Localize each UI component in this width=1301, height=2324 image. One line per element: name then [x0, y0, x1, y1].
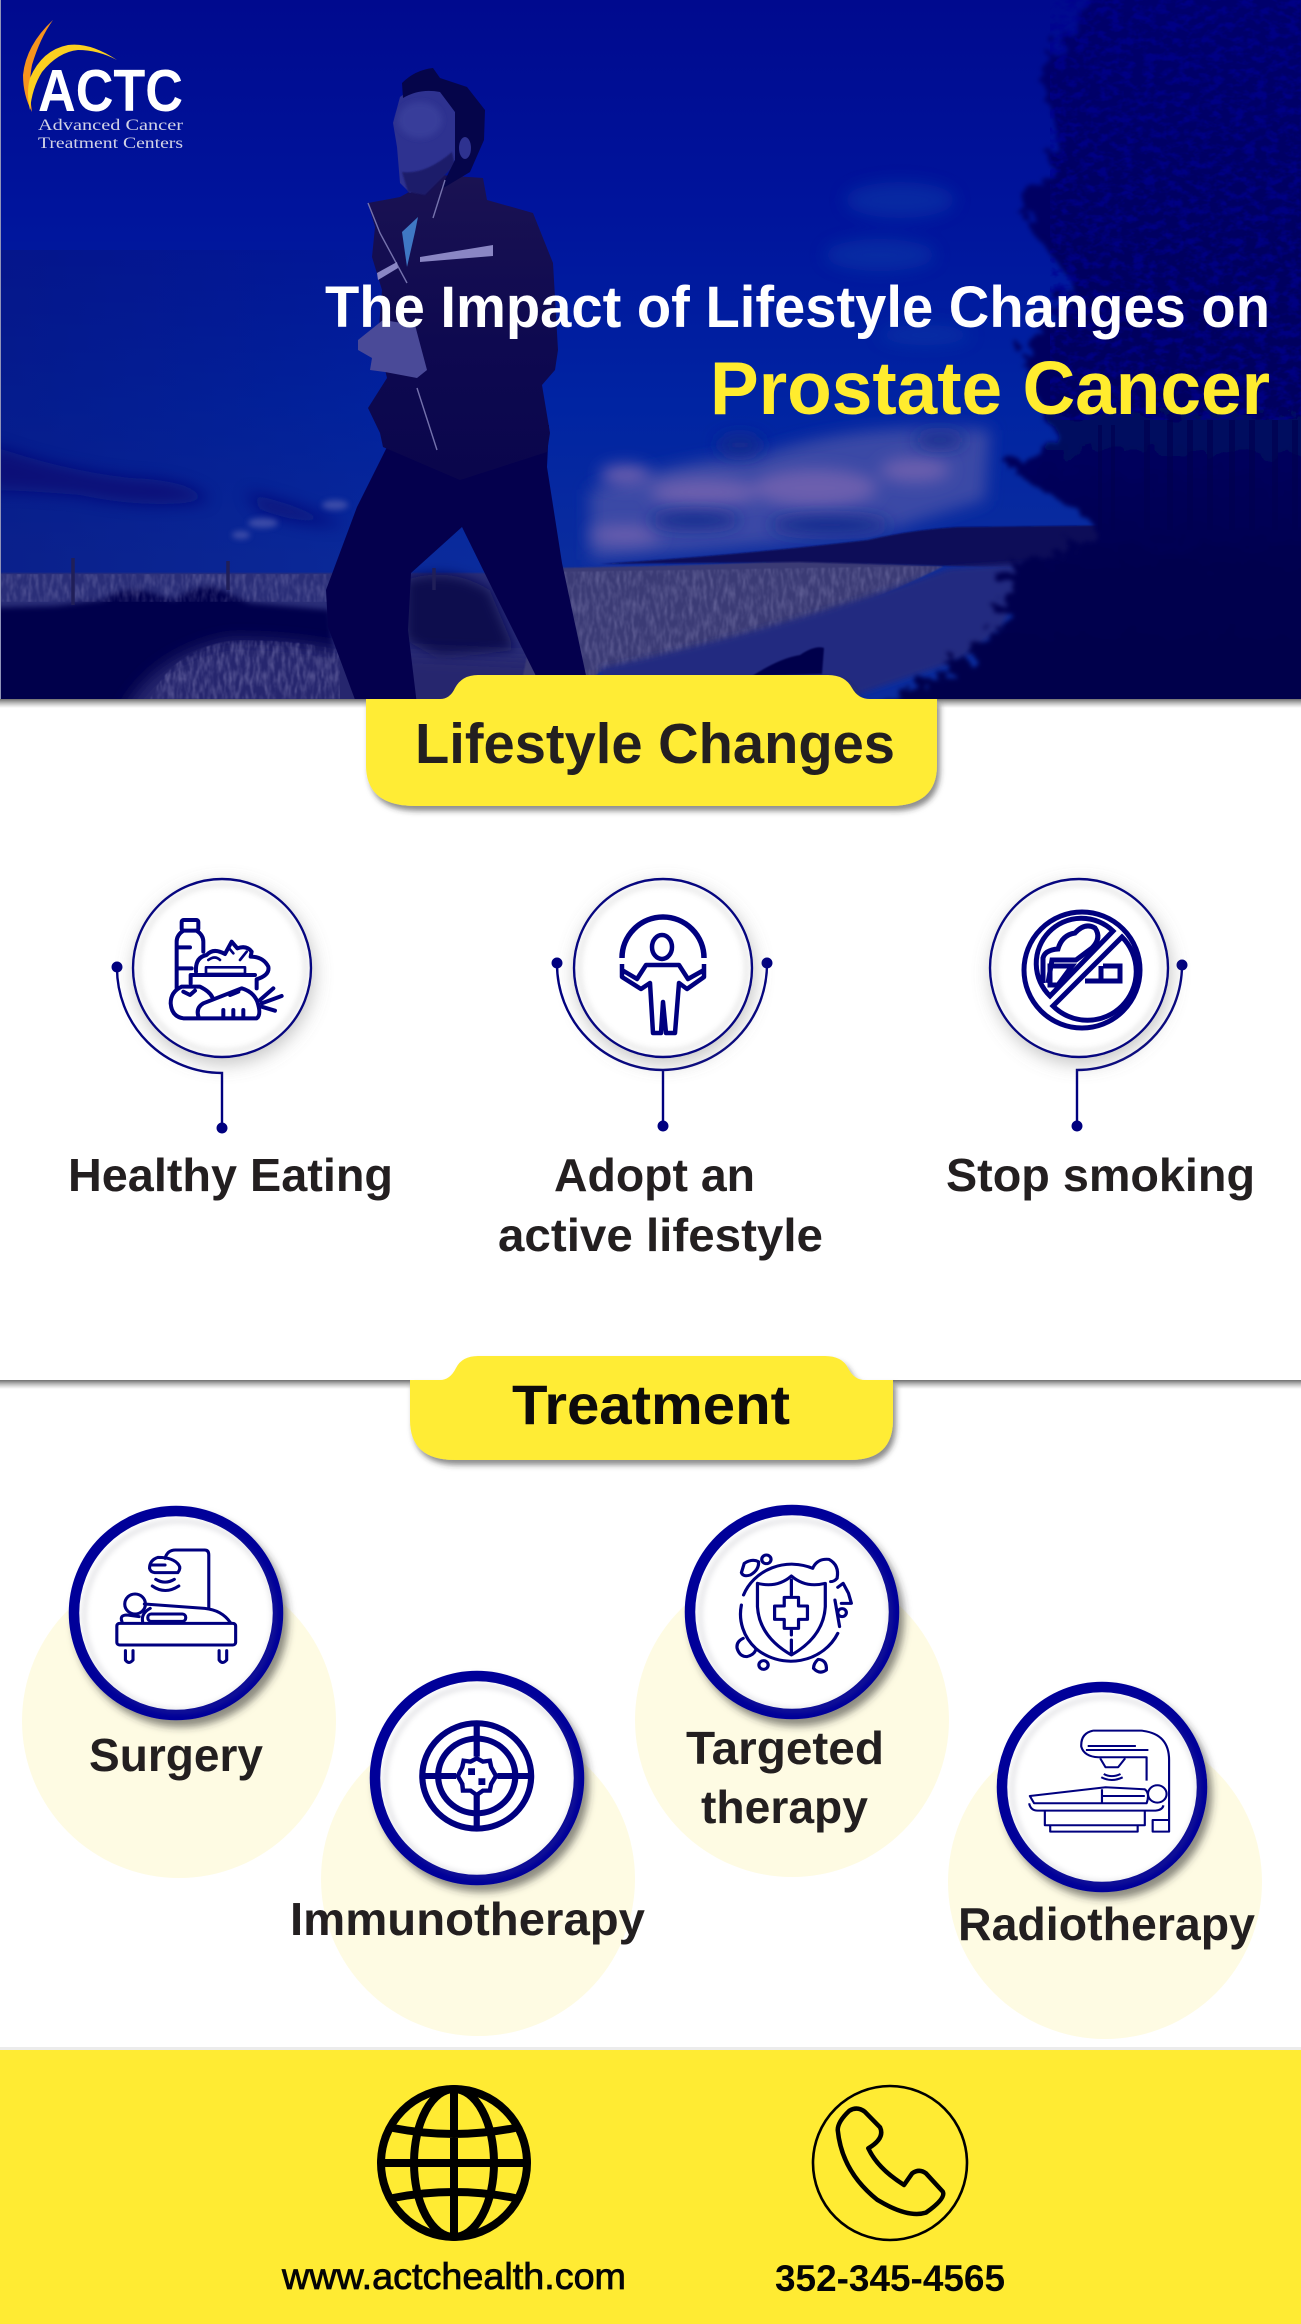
- phone circle: [813, 2086, 967, 2240]
- canopy: [882, 0, 1301, 699]
- icon: shield: [737, 1555, 851, 1672]
- phone number: 352-345-4565: [775, 2258, 1005, 2299]
- zipper trim: [368, 180, 445, 450]
- panel: contact footer: [0, 2047, 1301, 2324]
- handset: [838, 2109, 943, 2214]
- circle: [133, 879, 311, 1057]
- logo subtitle line 2: Treatment Centers: [38, 135, 183, 152]
- icon: food basket: [171, 920, 282, 1018]
- label: Radiotherapy: [958, 1898, 1255, 1950]
- logo: ACTC: [23, 20, 184, 152]
- connector dots: [112, 962, 228, 1134]
- texture right field: [564, 566, 938, 675]
- tab text: Lifestyle Changes: [415, 712, 895, 776]
- label: Surgery: [89, 1729, 263, 1781]
- branch texture: [1050, 0, 1301, 420]
- face highlight: [398, 102, 442, 138]
- logo arc: orange: [23, 20, 53, 112]
- label line 2: therapy: [701, 1781, 868, 1833]
- sky: [1, 0, 1098, 699]
- circle: [990, 879, 1168, 1057]
- face: [393, 89, 455, 193]
- reflective stripes: [377, 245, 493, 280]
- dark clouds left: [0, 445, 345, 525]
- icon: no smoking: [1024, 912, 1140, 1028]
- ring inner shadow: [700, 1520, 890, 1710]
- icon: surgery bed: [117, 1550, 236, 1662]
- runner: [326, 68, 587, 705]
- ring: [690, 1510, 894, 1714]
- icon: globe: [381, 2089, 527, 2237]
- ring inner shadow: [385, 1686, 575, 1876]
- ring inner shadow: [1012, 1697, 1198, 1883]
- circle inner halo: [995, 884, 1163, 1052]
- label: stop smoking: Stop smoking: [946, 1149, 1255, 1201]
- hero bottom shadow: [0, 699, 1301, 708]
- small light clouds: [232, 500, 348, 539]
- heading tab: Lifestyle Changes: [366, 675, 937, 806]
- label: Immunotherapy: [290, 1893, 645, 1945]
- connector arc: [557, 963, 767, 1126]
- line 1: Adopt an: [554, 1149, 755, 1201]
- icon: jump rope: [622, 917, 704, 1033]
- grass mound: [126, 634, 524, 699]
- icon: target: [422, 1723, 532, 1830]
- panel: treatments: [22, 1510, 1262, 2039]
- left sky dimming: [1, 250, 320, 573]
- circle inner halo: [138, 884, 306, 1052]
- title line 2: Prostate Cancer: [710, 346, 1270, 430]
- logo subtitle line 1: Advanced Cancer: [38, 117, 184, 134]
- circle inner halo: [579, 884, 747, 1052]
- section bottom shadow: [0, 1380, 1301, 1389]
- pale backdrop circles: [22, 1563, 1262, 2039]
- title line 1: The Impact of Lifestyle Changes on: [325, 275, 1270, 340]
- texture foreground mound: [150, 640, 340, 699]
- hand: [358, 320, 427, 378]
- jacket: [368, 175, 558, 448]
- label line 1: Targeted: [686, 1722, 884, 1774]
- item: radiotherapy: [958, 1687, 1255, 1950]
- ring: [1002, 1687, 1202, 1887]
- footer top edge: [0, 2047, 1301, 2050]
- logo wordmark: ACTC: [38, 58, 183, 124]
- tree trunks: [1098, 420, 1298, 462]
- hair: [402, 68, 485, 190]
- item: immunotherapy: [290, 1676, 645, 1945]
- connector dots: [1072, 960, 1188, 1132]
- item: surgery: [74, 1511, 278, 1781]
- grass texture: [0, 566, 944, 699]
- dark hedge: [1, 584, 335, 699]
- blue shirt: [402, 217, 418, 267]
- ring: [74, 1511, 278, 1715]
- cloud base glow: [590, 428, 990, 560]
- logo arc: yellow: [28, 45, 117, 110]
- panel: hero photo banner: [0, 0, 1301, 740]
- circle: [574, 879, 752, 1057]
- item: active lifestyle: [552, 879, 773, 1132]
- road shadow: [752, 647, 824, 676]
- item: targeted therapy: [686, 1510, 894, 1833]
- tab shape: [410, 1356, 893, 1460]
- label: adopt an active lifestyle: [498, 1149, 823, 1261]
- faint wispy upper clouds: [828, 180, 956, 343]
- cloud pink highlights: [590, 458, 950, 544]
- connector arc: [1077, 965, 1182, 1126]
- icon: phone: [813, 2086, 967, 2240]
- connector dots: [552, 958, 773, 1132]
- texture far field: [0, 574, 330, 602]
- ring inner shadow: [84, 1521, 274, 1711]
- tab text: Treatment: [512, 1373, 790, 1436]
- ring: [375, 1676, 579, 1880]
- item: healthy eating: [112, 879, 311, 1134]
- forest mass on right: [882, 0, 1301, 699]
- tab shape: [366, 675, 937, 806]
- ear: [459, 137, 471, 159]
- fence posts: [73, 558, 434, 605]
- left edge line: [0, 0, 1, 699]
- label: healthy eating: Healthy Eating: [68, 1149, 393, 1201]
- hedge between legs: [405, 574, 515, 660]
- field right: [523, 562, 943, 675]
- item: stop smoking: [990, 879, 1188, 1132]
- footer background: [0, 2050, 1301, 2324]
- heading tab: Treatment: [410, 1356, 893, 1460]
- connector arc: [117, 967, 222, 1128]
- legs: [326, 425, 587, 705]
- website: www.actchealth.com: [281, 2256, 626, 2297]
- panel: lifestyle items: [68, 879, 1255, 1261]
- sunset clouds: [590, 428, 990, 560]
- beard: [402, 152, 455, 195]
- cloud shadows: [650, 433, 965, 534]
- road: [600, 562, 1046, 699]
- line 2: active lifestyle: [498, 1209, 823, 1261]
- distant treeline: [604, 524, 1100, 567]
- far field left: [1, 572, 526, 664]
- icon: radiotherapy machine: [1029, 1731, 1169, 1832]
